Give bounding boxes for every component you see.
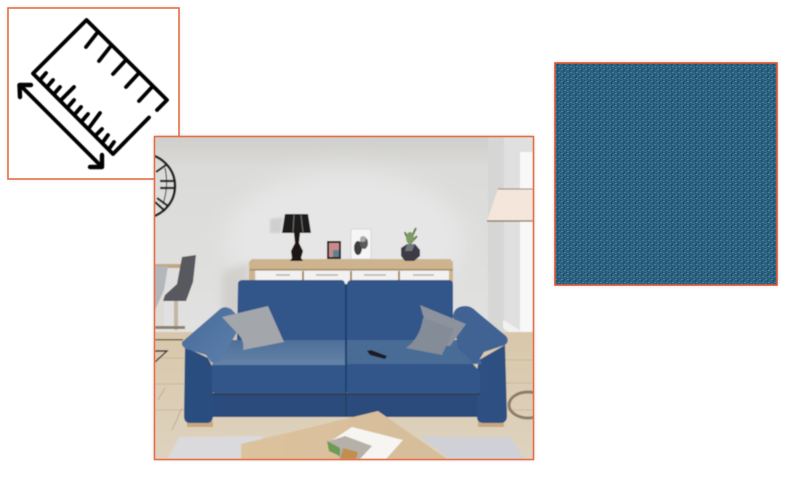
magazine [327,427,403,459]
coffee table [241,411,447,459]
table lamp [270,214,311,261]
sofa legs [187,421,213,427]
vase with plant [401,228,420,261]
dining table and chair [155,255,196,362]
panel: ruler dimensions icon [8,8,179,179]
floor ring [507,390,533,420]
sofa arm fronts [184,347,213,423]
pillows [222,306,284,350]
picture frame small [327,241,341,259]
picture frame large [351,229,371,259]
remote control [367,350,387,359]
floor [155,332,533,459]
sofa [182,280,508,427]
floor lamp [487,189,533,221]
panel: living room photo [152,134,536,462]
wall [155,137,488,332]
sideboard [249,259,453,284]
sideboard shadow [222,262,250,345]
wall column and window [488,137,533,342]
panel: fabric swatch [555,63,777,285]
sofa seats [212,340,345,365]
clock [155,154,177,218]
sofa arm tops [182,307,237,363]
sofa base [205,393,488,417]
sofa back cushions [237,280,345,341]
icon: ruler with measuring arrow [20,20,167,167]
rug [168,436,525,459]
